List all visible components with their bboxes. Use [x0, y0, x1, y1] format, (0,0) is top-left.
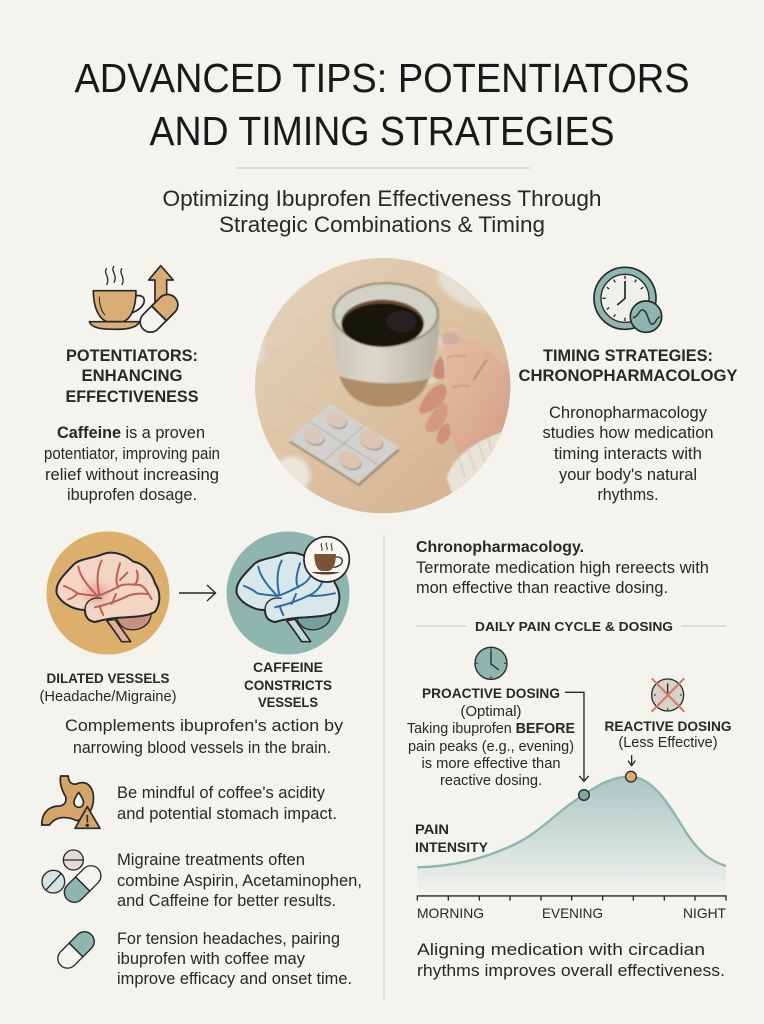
label: reactive dosing: (Less Effective) [618, 735, 718, 751]
text: chronopharmacology description: timing interacts with [554, 444, 702, 463]
label: dilated vessels: (Headache/Migraine) [40, 689, 176, 705]
text: migraine treatments tip: combine Aspirin, Acetaminophen, [117, 872, 362, 890]
label: proactive dosing: reactive dosing. [440, 773, 542, 789]
label: pain intensity axis [415, 822, 488, 855]
text: chronopharmacology note [416, 539, 709, 597]
text: chronopharmacology note: Chronopharmacology. [416, 539, 584, 556]
icon: clock crossed out [652, 678, 684, 712]
subtitle: Strategic Combinations & Timing [219, 212, 545, 237]
marker: proactive [579, 790, 589, 800]
heading: daily pain cycle: DAILY PAIN CYCLE & DOSING [475, 619, 673, 634]
text: chronopharmacology description: Chronopharmacology [549, 403, 707, 422]
label: reactive dosing [604, 718, 732, 751]
icon: stomach with warning [42, 776, 100, 828]
label: time axis [417, 905, 726, 921]
text: chronopharmacology description: studies how medication [542, 423, 714, 442]
label: time axis: EVENING [542, 905, 603, 921]
heading: potentiators [66, 346, 198, 406]
heading: timing strategies [518, 346, 738, 385]
icon: assorted pills [42, 850, 105, 906]
text: caffeine description: relief without increasing [45, 465, 219, 484]
heading: potentiators: POTENTIATORS: [66, 346, 198, 365]
label: proactive dosing: pain peaks (e.g., evening) [408, 739, 574, 755]
text: caffeine description: Caffeine is a proven [57, 423, 205, 442]
text: coffee acidity tip [117, 784, 337, 823]
text: tension headaches tip: improve efficacy and onset time. [117, 970, 352, 988]
subtitle [162, 186, 602, 237]
label: proactive dosing: (Optimal) [460, 704, 522, 720]
title [74, 55, 690, 154]
heading: potentiators: EFFECTIVENESS [66, 387, 198, 406]
label: reactive dosing: REACTIVE DOSING [604, 718, 732, 734]
label: caffeine constricts vessels: VESSELS [258, 694, 318, 710]
blister shadow and pack [288, 404, 400, 486]
heading: potentiators: ENHANCING [82, 366, 182, 385]
text: tension headaches tip [117, 930, 352, 988]
arrow: proactive leader [565, 692, 589, 781]
text: caffeine description: ibuprofen dosage. [67, 485, 197, 504]
marker: reactive [626, 771, 636, 782]
label: proactive dosing: Taking ibuprofen BEFORE [407, 721, 575, 737]
text: complements ibuprofen [65, 716, 344, 757]
mug [332, 282, 446, 407]
text: tension headaches tip: ibuprofen with coffee may [117, 950, 306, 968]
heading: timing strategies: CHRONOPHARMACOLOGY [518, 366, 738, 385]
text: caffeine description: potentiator, improving pain [44, 444, 220, 463]
text: complements ibuprofen: narrowing blood vessels in the brain. [73, 738, 331, 757]
chart: pain intensity curve [417, 647, 726, 901]
text: chart conclusion [417, 940, 725, 980]
text: caffeine description [44, 423, 220, 504]
label: caffeine constricts vessels: CONSTRICTS [244, 677, 332, 693]
label: caffeine constricts vessels [244, 659, 332, 710]
label: proactive dosing [407, 685, 575, 789]
label: proactive dosing: is more effective than [422, 756, 560, 772]
text: migraine treatments tip: Migraine treatments often [117, 851, 305, 869]
subtitle: Optimizing Ibuprofen Effectiveness Through [162, 186, 602, 211]
label: dilated vessels: DILATED VESSELS [46, 670, 170, 686]
heading: timing strategies: TIMING STRATEGIES: [543, 346, 713, 365]
text: tension headaches tip: For tension headaches, pairing [117, 930, 340, 948]
label: pain intensity axis: PAIN [415, 822, 449, 837]
text: chronopharmacology description [542, 403, 714, 504]
text: chart conclusion: Aligning medication with circadian [417, 940, 705, 959]
label: time axis: MORNING [417, 905, 484, 921]
text: chronopharmacology description: your body's natural [559, 465, 697, 484]
icon: brain with constricted vessels and coffee badge [226, 532, 350, 654]
text: migraine treatments tip [117, 851, 362, 910]
label: pain intensity axis: INTENSITY [415, 840, 488, 855]
icon: coffee cup, arrow and capsule [89, 266, 182, 336]
text: complements ibuprofen: Complements ibuprofen's action by [65, 716, 344, 735]
diagram: brain vessels comparison [46, 532, 350, 654]
icon: clock proactive [475, 647, 507, 679]
icon: brain with dilated vessels [46, 532, 170, 654]
label: caffeine constricts vessels: CAFFEINE [253, 659, 323, 675]
arrow [179, 585, 216, 601]
text: coffee acidity tip: Be mindful of coffee's acidity [117, 784, 326, 802]
hand [419, 331, 515, 500]
text: chronopharmacology description: rhythms. [598, 485, 658, 504]
label: dilated vessels [40, 670, 176, 705]
text: chronopharmacology note: mon effective than reactive dosing. [416, 579, 668, 597]
label: time axis: NIGHT [683, 905, 726, 921]
text: chart conclusion: rhythms improves overall effectiveness. [417, 961, 725, 980]
text: coffee acidity tip: and potential stomach impact. [117, 805, 337, 823]
text: migraine treatments tip: and Caffeine for better results. [117, 892, 336, 910]
icon: capsule [54, 928, 98, 972]
label: proactive dosing: PROACTIVE DOSING [422, 685, 560, 701]
photo: coffee mug, hand and blister pack [251, 257, 515, 517]
title: AND TIMING STRATEGIES [150, 108, 614, 154]
arrow: reactive pointer [628, 755, 635, 766]
text: chronopharmacology note: Termorate medication high rereects with [416, 559, 709, 577]
icon: clock with wave [594, 267, 662, 332]
title: ADVANCED TIPS: POTENTIATORS [74, 55, 690, 101]
